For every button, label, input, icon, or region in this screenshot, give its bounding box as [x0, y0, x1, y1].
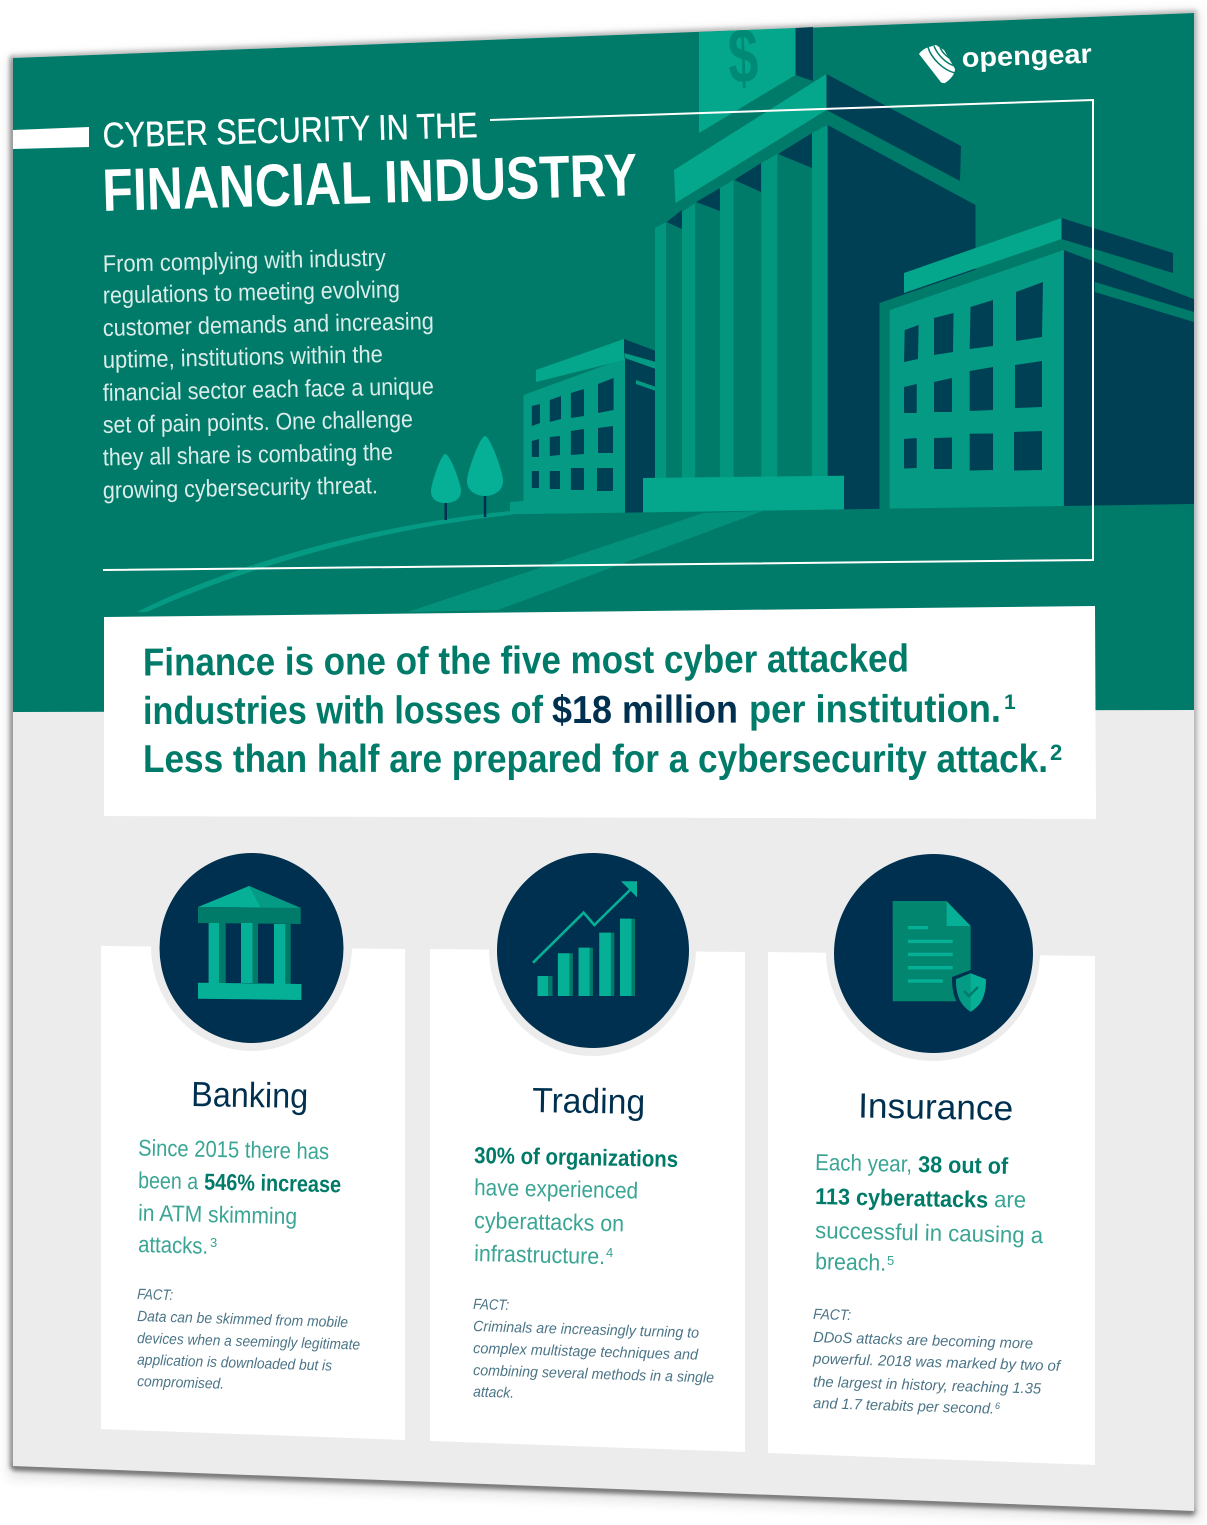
- illustration: central bank tower: $: [727, 11, 760, 100]
- trading statistic: 30% of organizations: [474, 1142, 678, 1172]
- insurance heading: Insurance: [858, 1087, 1014, 1128]
- callout text: industries with losses of: [143, 689, 544, 733]
- panel: trading: [430, 842, 745, 1452]
- banking statistic: [138, 1135, 341, 1259]
- insurance fact: DDoS attacks are becoming more: [813, 1329, 1033, 1353]
- decorative white title bar: [13, 127, 89, 149]
- icon: bank building: [160, 853, 344, 1043]
- insurance statistic: Each year,: [815, 1149, 912, 1177]
- icon halo: [489, 842, 696, 1056]
- insurance fact: powerful. 2018 was marked by two of: [812, 1350, 1062, 1375]
- banking statistic: Since 2015 there has: [138, 1135, 329, 1164]
- banking fact: FACT:: [137, 1286, 173, 1304]
- trading statistic: [474, 1142, 678, 1269]
- intro text: From complying with industry: [103, 245, 386, 278]
- insurance fact: 6: [995, 1401, 1000, 1411]
- banking fact: Data can be skimmed from mobile: [137, 1308, 348, 1331]
- banking fact: [137, 1286, 360, 1393]
- logo: opengear: [919, 39, 1093, 83]
- trading fact: combining several methods in a single: [473, 1362, 714, 1387]
- trading statistic: cyberattacks on: [474, 1207, 624, 1236]
- trading heading: Trading: [532, 1081, 646, 1122]
- ground and road: [137, 504, 1194, 612]
- insurance statistic: breach.: [815, 1248, 886, 1276]
- trading fact: FACT:: [473, 1296, 509, 1314]
- callout text: 1: [1004, 691, 1016, 714]
- trading fact: [473, 1296, 714, 1402]
- trading fact: complex multistage techniques and: [473, 1340, 699, 1364]
- banking fact: application is downloaded but is: [137, 1352, 333, 1375]
- banking statistic: in ATM skimming: [138, 1200, 297, 1229]
- intro text: customer demands and increasing: [103, 308, 434, 342]
- intro text: uptime, institutions within the: [103, 341, 383, 374]
- callout text: 2: [1050, 740, 1062, 765]
- panel: key statistic callout: [104, 606, 1096, 819]
- illustration: central bank tower: [643, 11, 976, 514]
- trading fact: attack.: [473, 1384, 514, 1402]
- hero green background: [13, 13, 1194, 712]
- insurance statistic: [815, 1149, 1044, 1276]
- banking statistic: been a: [138, 1167, 199, 1194]
- icon: logo mark: [919, 45, 955, 83]
- icon: tree small: [431, 454, 461, 520]
- insurance fact: the largest in history, reaching 1.35: [813, 1374, 1042, 1398]
- banking statistic: attacks.: [138, 1231, 208, 1259]
- panel: banking: [101, 841, 405, 1440]
- insurance fact: [812, 1306, 1062, 1418]
- intro text: [103, 245, 434, 504]
- insurance statistic: 5: [887, 1253, 894, 1268]
- heading: [101, 105, 638, 224]
- panel: insurance: [768, 843, 1095, 1465]
- insurance fact: FACT:: [813, 1306, 851, 1324]
- callout text: per institution.: [749, 688, 1001, 731]
- trading fact: Criminals are increasingly turning to: [473, 1318, 699, 1342]
- insurance fact: and 1.7 terabits per second.: [813, 1395, 994, 1418]
- callout text: $18 million: [552, 689, 738, 732]
- illustration: right office building: [880, 218, 1194, 510]
- trading statistic: infrastructure.: [474, 1240, 605, 1269]
- icon: document with shield: [834, 854, 1033, 1053]
- callout text: Less than half are prepared for a cybersecurity attack.: [143, 738, 1048, 781]
- callout text: [143, 637, 1062, 781]
- trading statistic: 4: [606, 1245, 613, 1260]
- banking statistic: 546% increase: [204, 1169, 341, 1197]
- banking heading: Banking: [191, 1075, 309, 1116]
- banking statistic: 3: [210, 1235, 217, 1250]
- heading: CYBER SECURITY IN THE: [102, 105, 478, 155]
- illustration: left office building: [510, 339, 656, 514]
- callout text: Finance is one of the five most cyber attacked: [143, 637, 909, 684]
- intro text: growing cybersecurity threat.: [103, 472, 378, 504]
- icon: rising bar chart: [497, 853, 689, 1048]
- banking fact: compromised.: [137, 1373, 224, 1393]
- intro text: financial sector each face a unique: [103, 373, 434, 407]
- icon halo: [826, 843, 1040, 1061]
- panel: hero header: [13, 11, 1194, 712]
- intro text: set of pain points. One challenge: [103, 406, 413, 439]
- icon: tree large: [467, 436, 503, 517]
- insurance statistic: 113 cyberattacks: [815, 1183, 988, 1213]
- insurance statistic: 38 out of: [918, 1151, 1009, 1179]
- intro text: regulations to meeting evolving: [103, 276, 400, 309]
- icon halo: [151, 841, 352, 1051]
- heading: FINANCIAL INDUSTRY: [101, 141, 638, 224]
- trading statistic: have experienced: [474, 1174, 638, 1203]
- insurance statistic: are: [994, 1186, 1026, 1213]
- intro text: they all share is combating the: [103, 439, 393, 471]
- frame outline: [103, 100, 1093, 570]
- logo wordmark: opengear: [961, 39, 1093, 73]
- banking fact: devices when a seemingly legitimate: [137, 1330, 360, 1354]
- insurance statistic: successful in causing a: [815, 1217, 1044, 1248]
